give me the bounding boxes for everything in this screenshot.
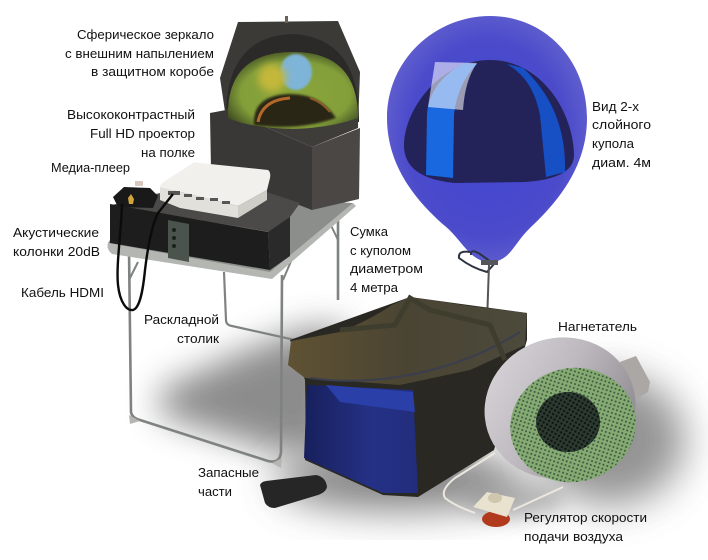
label: bag: с куполом	[350, 243, 411, 258]
label: bag: 4 метра	[350, 280, 399, 295]
label: spare parts: Запасные	[198, 465, 259, 480]
label: regulator	[524, 510, 647, 544]
power cord	[444, 453, 563, 513]
table legs	[129, 205, 338, 462]
balloon knot	[459, 251, 494, 272]
dome inside balloon	[404, 60, 574, 183]
label: dome view: купола	[592, 136, 635, 151]
label: speakers: колонки 20dB	[13, 244, 100, 259]
label: blower: Нагнетатель	[558, 319, 637, 334]
label: folding table: Раскладной	[144, 312, 219, 327]
label: regulator: Регулятор скорости	[524, 510, 647, 525]
bag lid	[288, 297, 527, 385]
label: dome view: Вид 2-х	[592, 99, 640, 114]
box left face	[210, 110, 312, 210]
label: media player: Медиа-плеер	[51, 160, 130, 175]
box right face	[312, 128, 360, 210]
bag tether	[487, 265, 489, 322]
box lid	[220, 21, 360, 125]
label: dome view: диам. 4м	[592, 155, 651, 170]
HDMI cable	[118, 194, 173, 310]
blower	[466, 318, 654, 498]
blower housing	[466, 318, 654, 498]
blower grille	[500, 356, 646, 494]
label: spherical mirror	[65, 27, 214, 79]
label: dome view: слойного	[592, 117, 651, 132]
label: spare parts: части	[198, 484, 232, 499]
label: projector: Высококонтрастный	[67, 107, 195, 122]
protective box with spherical mirror	[210, 16, 360, 210]
label: spherical mirror: Сферическое зеркало	[77, 27, 214, 42]
balloon highlight	[428, 62, 477, 110]
balloon with dome	[387, 16, 587, 272]
table top	[108, 203, 356, 279]
mirror dome	[228, 52, 358, 129]
label: folding table: столик	[177, 331, 219, 346]
blower opening	[536, 392, 600, 452]
black shelf with speakers	[110, 180, 300, 270]
label: spare parts	[198, 465, 259, 499]
label: regulator: подачи воздуха	[524, 529, 624, 544]
label: spherical mirror: с внешним напылением	[65, 46, 214, 61]
folding table	[108, 200, 356, 468]
media player	[113, 181, 158, 208]
bag straps	[340, 298, 505, 360]
side box	[620, 356, 650, 405]
label: speakers	[13, 225, 100, 259]
label: speakers: Акустические	[13, 225, 99, 240]
label: spherical mirror: в защитном коробе	[91, 64, 214, 79]
bag blue panel	[304, 385, 418, 493]
label: folding table	[144, 312, 219, 346]
label: dome view	[592, 99, 651, 170]
projector	[160, 162, 270, 218]
label: bag	[350, 224, 423, 295]
label: projector	[67, 107, 195, 160]
label: projector: Full HD проектор	[90, 126, 195, 141]
label: HDMI cable: Кабель HDMI	[21, 285, 104, 300]
bag body	[290, 297, 527, 497]
speed regulator	[473, 492, 515, 527]
bag with dome	[288, 297, 527, 497]
ground shadows	[160, 325, 685, 518]
label: projector: на полке	[141, 145, 195, 160]
label: bag: диаметром	[350, 261, 423, 276]
label: bag: Сумка	[350, 224, 389, 239]
table feet	[129, 415, 282, 468]
spare parts	[260, 475, 327, 508]
